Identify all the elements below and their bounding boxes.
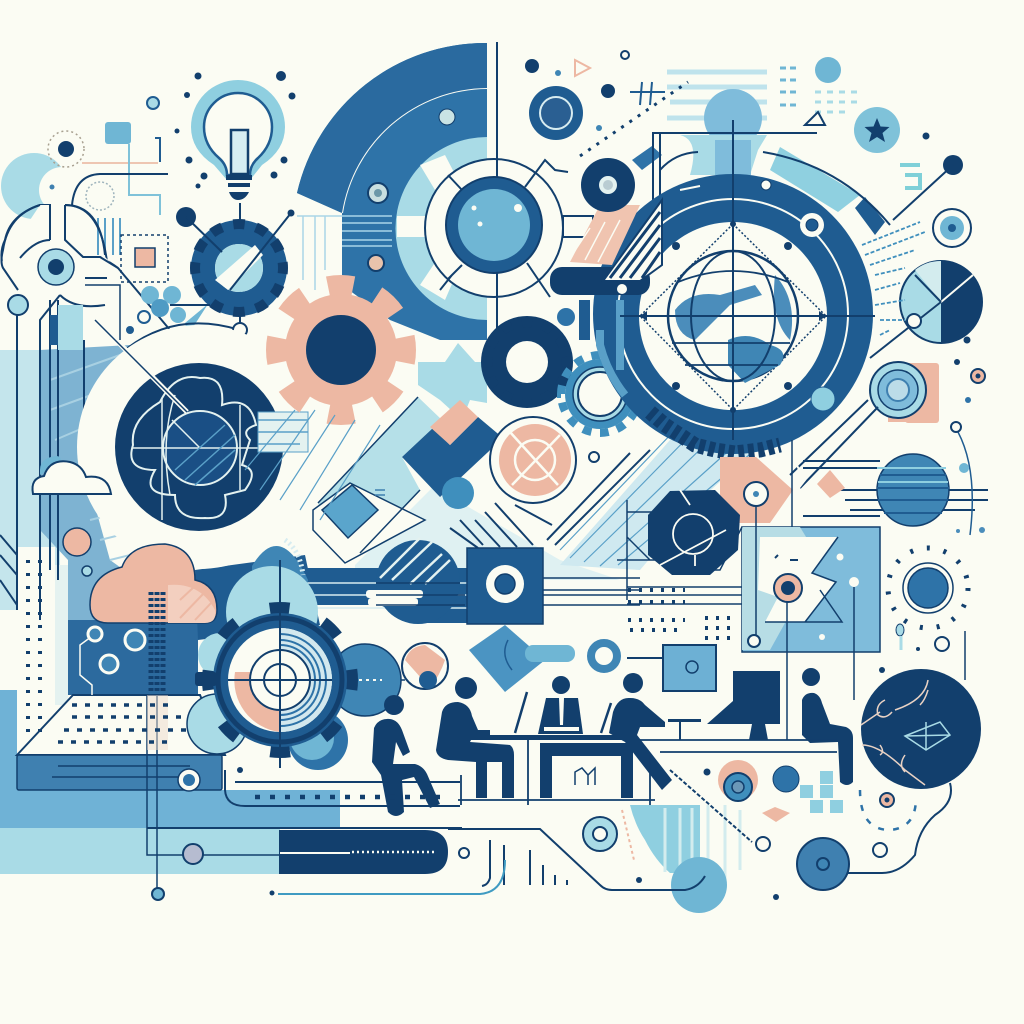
panel: central diagonal pale bands	[318, 397, 760, 580]
icon: spiral circle	[790, 336, 985, 488]
panel: dotted white column	[28, 560, 40, 740]
icon: diamond blocks	[402, 400, 503, 509]
icon: bottom blue blob	[583, 770, 770, 913]
panel: hatched stripes on blue band	[50, 355, 150, 560]
icon: dots around bulb	[147, 71, 296, 188]
panel: inner arc white line	[342, 88, 487, 213]
panel: horizontal lines and square target	[467, 548, 742, 624]
panel: bottom thin blue line	[270, 860, 505, 896]
panel: base connector line	[225, 770, 951, 890]
icon: central lens with rings	[368, 42, 593, 347]
figure: person at centre in suit	[538, 676, 583, 734]
icon: star badge	[815, 57, 930, 188]
figure: person at right	[802, 668, 853, 785]
figure: person right of centre	[609, 673, 672, 790]
icon: hatched capsule bar	[550, 200, 662, 340]
panel: stacked bars behind cloud	[252, 540, 467, 623]
panel: outer band shade	[297, 43, 487, 213]
icon: bottom central gear target	[187, 560, 401, 770]
figure: seated person left	[372, 695, 440, 816]
icon: navy network circle	[861, 667, 981, 789]
panel: brain circle with white halo	[77, 320, 321, 569]
icon: hexagon cluster	[125, 286, 247, 350]
icon: small rings on left block	[80, 627, 145, 695]
icon: striped navy circle	[366, 538, 465, 624]
icon: navy gear upper left	[176, 207, 294, 312]
icon: top-left target and light shapes	[1, 122, 168, 255]
icon: black gear	[487, 322, 567, 402]
icon: light teal gear	[418, 343, 487, 420]
panel: left vertical rails	[0, 300, 84, 620]
icon: globe target with navy rings	[593, 68, 890, 454]
chart: pie chart	[870, 261, 982, 358]
panel: tilted card	[313, 397, 425, 563]
icon: dotted circle cluster right	[860, 548, 968, 680]
icon: left outlined head shape with eye	[1, 205, 170, 352]
panel: striped lines near card	[450, 450, 650, 548]
monitor on right desk	[668, 671, 780, 740]
icon: blue gear	[561, 355, 639, 433]
figure: seated person at desk	[436, 677, 514, 798]
desk	[458, 692, 837, 805]
panel: dot matrix centre right	[628, 590, 735, 638]
icon: left small cloud	[32, 456, 111, 494]
icon: right top dot with line	[893, 155, 963, 220]
icon: light bulb	[191, 80, 285, 560]
panel: right blue diamond box	[720, 440, 880, 740]
icon: bottom capsule bar	[152, 769, 469, 900]
icon: peach cloud	[63, 528, 280, 888]
icon: peach crossed circle	[490, 417, 599, 503]
panel: left light-blue background blocks	[0, 345, 462, 874]
icon: small pie circle	[401, 643, 448, 689]
panel: team at desks	[372, 668, 853, 816]
icon: peach gear	[276, 285, 406, 415]
icon: striped planet	[803, 422, 988, 535]
icon: large blue arc	[297, 43, 487, 340]
icon: small dashed square	[121, 235, 168, 282]
icon: navy octagon gear	[617, 490, 742, 600]
panel: white stripes and wires on arc	[297, 216, 392, 290]
panel: right hatching	[862, 222, 925, 335]
icon: top rings	[525, 51, 825, 212]
icon: small monitor	[627, 645, 716, 691]
icon: right ring	[933, 209, 971, 247]
panel: floor dot rows	[58, 705, 190, 742]
icon: key diamond	[469, 625, 617, 692]
panel: diagonal hatching	[245, 410, 755, 566]
icon: lower right circles	[237, 760, 916, 900]
